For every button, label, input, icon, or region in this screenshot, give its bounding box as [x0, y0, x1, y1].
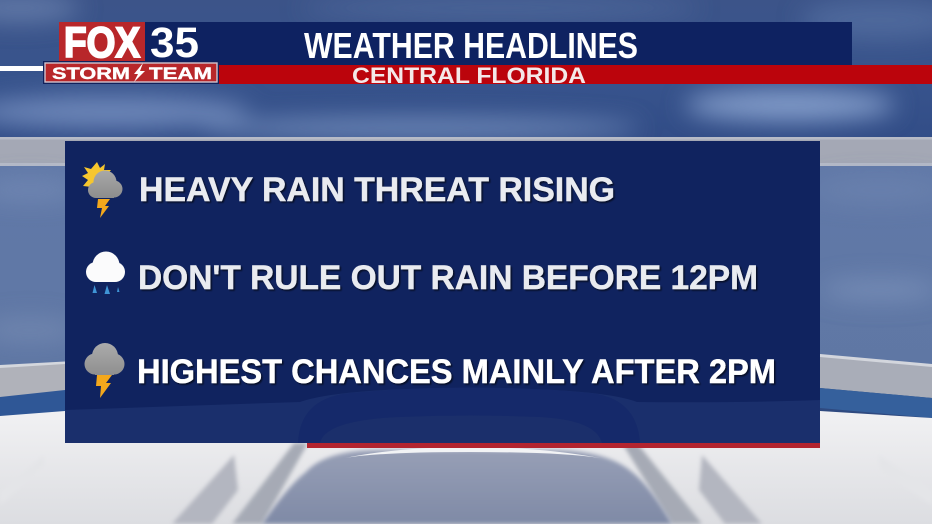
white line left — [0, 66, 44, 71]
logo: FOX 35 Storm Team: STORM — [52, 64, 130, 83]
wall ledge and blue band, right — [820, 356, 932, 398]
headline 3: HIGHEST CHANCES MAINLY AFTER 2PM — [137, 353, 776, 391]
icon: sun behind storm cloud — [82, 162, 122, 218]
subtitle: CENTRAL FLORIDA — [352, 63, 586, 88]
title: WEATHER HEADLINES — [304, 25, 638, 66]
headline 2: DON'T RULE OUT RAIN BEFORE 12PM — [138, 259, 758, 297]
header bar: navy — [218, 22, 852, 65]
icon: logo lightning — [134, 63, 145, 82]
headline 1: HEAVY RAIN THREAT RISING — [139, 171, 615, 209]
logo: FOX 35 Storm Team: TEAM — [149, 64, 212, 83]
wall ledge and blue band, left — [0, 362, 65, 398]
logo: FOX 35 Storm Team: 35 — [150, 19, 199, 67]
header bar: red — [218, 65, 932, 84]
icon: thunderstorm cloud — [84, 343, 124, 398]
panel red accent — [307, 443, 820, 448]
fins and rails — [232, 443, 308, 524]
logo: FOX 35 Storm Team: FOX — [64, 19, 140, 67]
panel: headlines — [65, 141, 820, 448]
icon: rain cloud — [86, 252, 125, 294]
logo: FOX 35 Storm Team — [43, 19, 219, 84]
dome — [262, 450, 672, 524]
